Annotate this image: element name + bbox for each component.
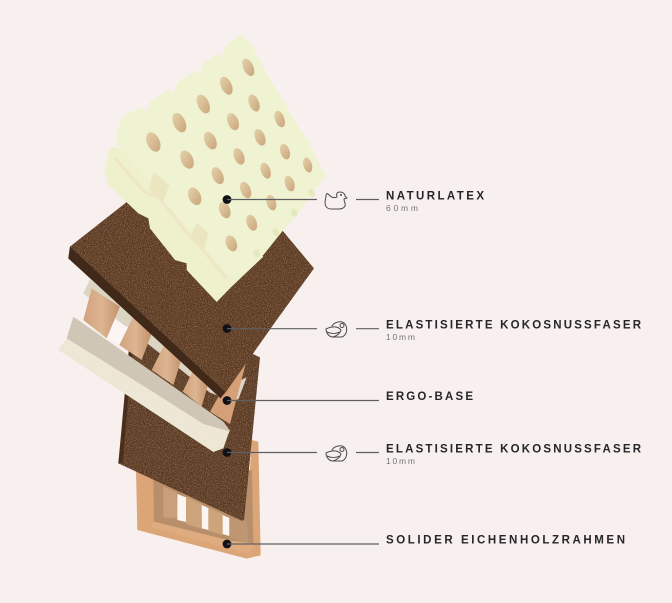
callout: Solider Eichenholzrahmen bbox=[223, 534, 625, 548]
icon: coconut halves bbox=[326, 322, 347, 337]
latex holes bbox=[143, 57, 314, 253]
callout: Ergo-Base: ERGO-BASE bbox=[386, 391, 473, 403]
callout: lower Elastisierte Kokosnussfaser: ELASTISIERTE KOKOSNUSSFASER bbox=[386, 444, 642, 456]
layer: natural latex bbox=[104, 35, 326, 302]
layer: oak frame bbox=[136, 440, 261, 559]
callout: Solider Eichenholzrahmen: SOLIDER EICHENHOLZRAHMEN bbox=[386, 534, 625, 546]
callout: upper Elastisierte Kokosnussfaser: 10mm bbox=[386, 332, 415, 342]
callout: Ergo-Base bbox=[223, 391, 473, 405]
layer: ergo-base slatted core bbox=[58, 279, 247, 452]
latex edge bumps bbox=[252, 188, 316, 258]
layer: lower coconut fibre bbox=[118, 300, 260, 521]
callout: lower Elastisierte Kokosnussfaser bbox=[223, 444, 642, 466]
callout: upper Elastisierte Kokosnussfaser bbox=[223, 319, 642, 342]
callout: upper Elastisierte Kokosnussfaser: ELASTISIERTE KOKOSNUSSFASER bbox=[386, 319, 642, 331]
icon: rubber duck bbox=[325, 192, 347, 209]
icon: coconut halves bbox=[326, 446, 347, 461]
latex side profile bbox=[104, 147, 263, 302]
callout: Naturlatex: NATURLATEX bbox=[386, 190, 484, 202]
latex top face bbox=[117, 35, 326, 278]
callout: Naturlatex bbox=[223, 190, 484, 213]
layer: upper coconut fibre bbox=[68, 184, 314, 398]
callout: Naturlatex: 60mm bbox=[386, 203, 418, 213]
callout: lower Elastisierte Kokosnussfaser: 10mm bbox=[386, 456, 415, 466]
